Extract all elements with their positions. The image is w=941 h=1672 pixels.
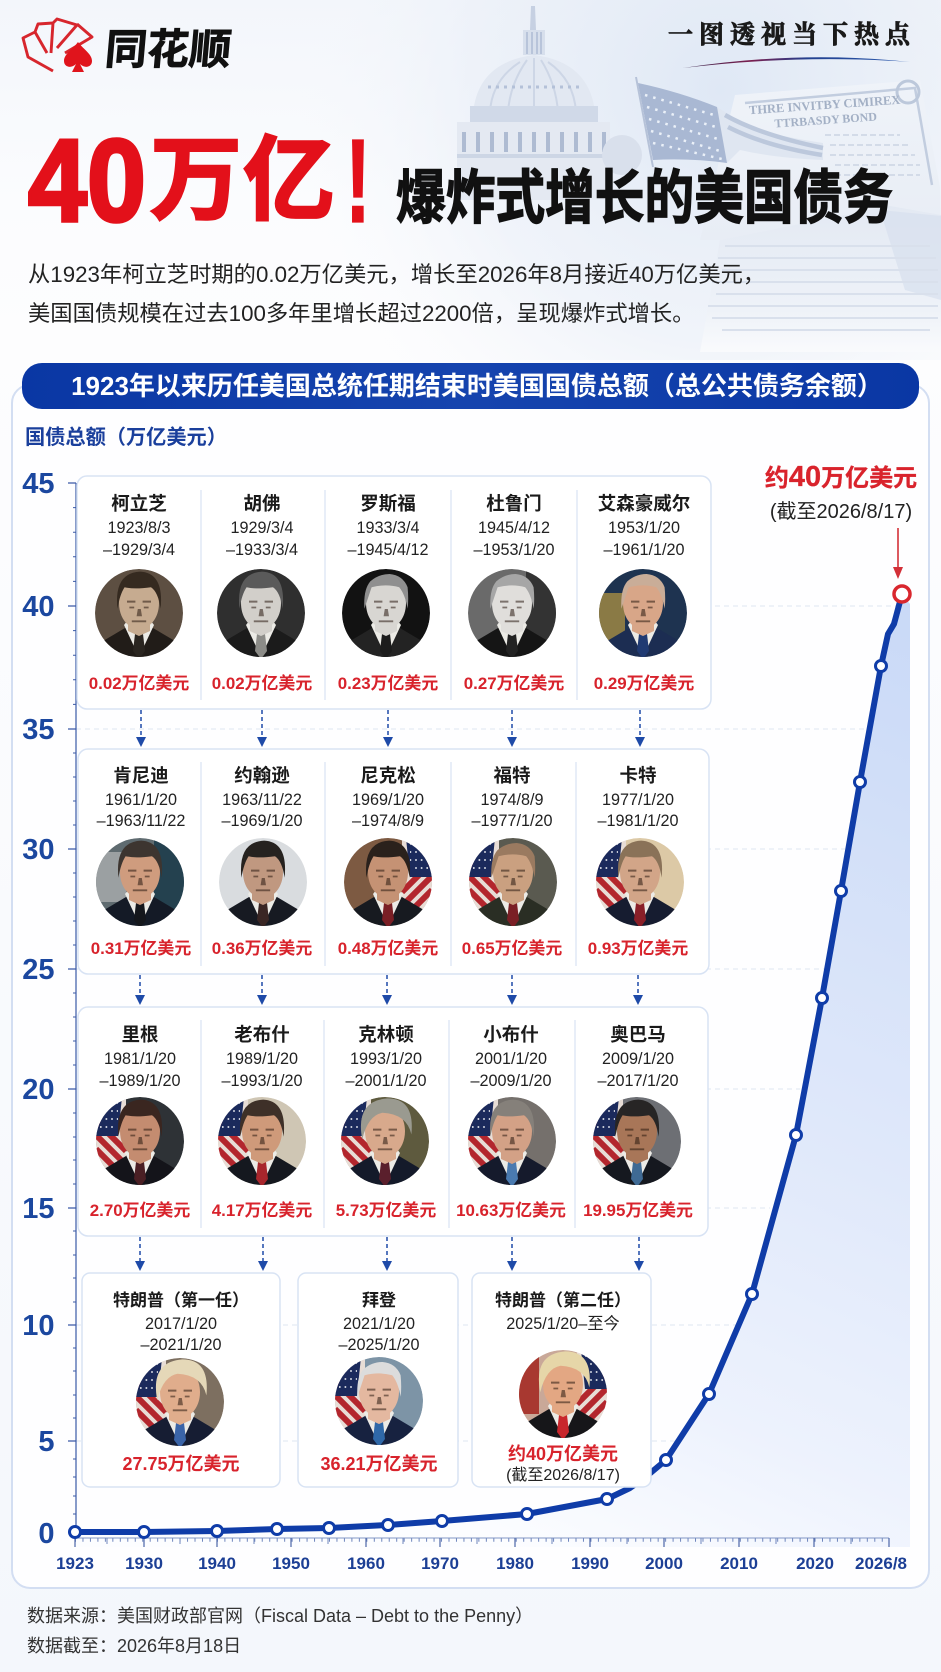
curve data points: [70, 660, 886, 1538]
card row 2: [78, 749, 709, 974]
panel heading: [22, 363, 919, 409]
president: 福特: 0.65万亿美元: [462, 938, 562, 958]
chart panel: [12, 385, 929, 1588]
callout: about 40 trillion: 约40万亿美元: [765, 461, 917, 493]
president: 福特: –1977/1/20: [471, 812, 553, 830]
main title: !: [345, 115, 371, 248]
president: 胡佛: 胡佛: [243, 493, 281, 514]
tagline: 一图透视当下热点: [668, 15, 916, 51]
president: 卡特: 0.93万亿美元: [588, 938, 688, 958]
y axis labels: [22, 468, 54, 1550]
arrows between rows 3 and 4: [135, 1237, 644, 1271]
main title: 40: [28, 115, 146, 246]
y axis labels: 25: [22, 954, 54, 986]
capitol dome: [457, 6, 642, 200]
president: 罗斯福: 0.23万亿美元: [338, 673, 438, 693]
president: 老布什: 1989/1/20: [226, 1050, 298, 1068]
y axis labels: 10: [22, 1310, 54, 1342]
president: 胡佛: 1929/3/4: [230, 519, 294, 537]
card: 拜登: 拜登: [362, 1291, 396, 1310]
y axis labels: 5: [38, 1426, 54, 1458]
president: 奥巴马: –2017/1/20: [597, 1072, 679, 1090]
x axis labels: 1930: [125, 1554, 163, 1573]
president: 罗斯福: 罗斯福: [360, 493, 416, 514]
x axis labels: [56, 1554, 907, 1573]
president: 约翰逊: [212, 765, 312, 958]
main title: [28, 115, 371, 248]
president: 罗斯福: 1933/3/4: [356, 519, 420, 537]
x axis labels: 1950: [272, 1554, 310, 1573]
president: 里根: [90, 1024, 190, 1220]
president: 约翰逊: –1969/1/20: [221, 812, 303, 830]
y axis labels: 15: [22, 1193, 54, 1225]
president: 胡佛: [212, 493, 312, 693]
president: 柯立芝: [89, 493, 189, 693]
card: 拜登: –2025/1/20: [338, 1336, 420, 1354]
president: 老布什: –1993/1/20: [221, 1072, 303, 1090]
president: 艾森豪威尔: 0.29万亿美元: [594, 673, 694, 693]
x axis labels: 1970: [421, 1554, 459, 1573]
president: 艾森豪威尔: –1961/1/20: [603, 541, 685, 559]
president: 卡特: –1981/1/20: [597, 812, 679, 830]
president: 里根: –1989/1/20: [99, 1072, 181, 1090]
card: 特朗普第一任: 27.75万亿美元: [122, 1453, 240, 1474]
president: 艾森豪威尔: 1953/1/20: [608, 519, 680, 537]
president: 约翰逊: 0.36万亿美元: [212, 938, 312, 958]
president: 克林顿: [336, 1024, 436, 1220]
card: 拜登: 36.21万亿美元: [320, 1453, 438, 1474]
card row 1: [77, 476, 711, 709]
arrows between rows 2 and 3: [135, 975, 643, 1005]
callout: about 40 trillion: (截至2026/8/17): [770, 500, 912, 523]
president: 老布什: 4.17万亿美元: [212, 1200, 312, 1220]
x axis: [56, 1538, 907, 1573]
card: 特朗普第一任: 2017/1/20: [145, 1315, 217, 1333]
president: 柯立芝: –1929/3/4: [103, 541, 175, 559]
bond document lettering: THRE INVITBY CIMIREX: [749, 93, 901, 117]
president: 肯尼迪: 0.31万亿美元: [91, 938, 191, 958]
president: 柯立芝: 1923/8/3: [107, 519, 171, 537]
y axis: [22, 468, 76, 1550]
president: 克林顿: 克林顿: [358, 1024, 414, 1045]
x axis labels: 1990: [571, 1554, 609, 1573]
intro text: [28, 262, 765, 326]
latest point marker: [894, 586, 910, 602]
y axis labels: 30: [22, 834, 54, 866]
card: 特朗普第二任: 特朗普（第二任）: [495, 1290, 631, 1310]
card: 特朗普第一任: –2021/1/20: [140, 1336, 222, 1354]
president: 里根: 里根: [121, 1024, 159, 1045]
president: 肯尼迪: 肯尼迪: [113, 765, 169, 786]
x axis labels: 1980: [496, 1554, 534, 1573]
president: 老布什: [212, 1024, 312, 1220]
president: 胡佛: –1933/3/4: [226, 541, 298, 559]
president: 里根: 1981/1/20: [104, 1050, 176, 1068]
president: 柯立芝: 柯立芝: [111, 493, 167, 514]
y axis labels: 35: [22, 714, 54, 746]
president: 约翰逊: 1963/11/22: [222, 791, 302, 809]
logo: 同花顺: [23, 19, 233, 73]
y axis labels: 0: [38, 1518, 54, 1550]
president: 尼克松: 0.48万亿美元: [338, 938, 438, 958]
area under curve: [75, 594, 910, 1547]
main title: 万亿: [150, 130, 336, 232]
arrows between rows 1 and 2: [136, 710, 645, 747]
debt curve line: [75, 594, 902, 1532]
card: 拜登: [298, 1273, 458, 1487]
president: 约翰逊: 约翰逊: [234, 765, 290, 786]
president: 胡佛: 0.02万亿美元: [212, 673, 312, 693]
bond document lettering: [749, 93, 902, 132]
president: 肯尼迪: –1963/11/22: [97, 812, 185, 830]
president: 奥巴马: 奥巴马: [610, 1024, 666, 1045]
president: 杜鲁门: 杜鲁门: [486, 493, 542, 514]
portrait: 特朗普 first term: [134, 1358, 226, 1448]
president: 小布什: 2001/1/20: [475, 1050, 547, 1068]
president: 奥巴马: 19.95万亿美元: [583, 1200, 693, 1220]
y axis labels: 40: [22, 591, 54, 623]
card: 特朗普第二任: 2025/1/20–至今: [506, 1315, 620, 1333]
logo: 同花顺: 同花顺: [103, 26, 233, 73]
president: 奥巴马: 2009/1/20: [602, 1050, 674, 1068]
president: 小布什: 10.63万亿美元: [456, 1200, 566, 1220]
x axis labels: 1960: [347, 1554, 385, 1573]
x axis labels: 2000: [645, 1554, 683, 1573]
president: 老布什: 老布什: [234, 1024, 290, 1045]
background illustration: capitol, flag, treasury bond and papers: [457, 6, 941, 352]
panel heading: 1923年以来历任美国总统任期结束时美国国债总额（总公共债务余额）: [71, 371, 883, 401]
president: 克林顿: 5.73万亿美元: [336, 1200, 436, 1220]
dashed gridlines: [76, 606, 902, 1441]
footer source note: 数据来源：美国财政部官网（Fiscal Data – Debt to the Penny）: [27, 1606, 533, 1626]
y axis title: 国债总额（万亿美元）: [25, 426, 227, 449]
callout: about 40 trillion: [765, 461, 917, 523]
president: 福特: 福特: [493, 765, 531, 786]
y axis labels: 20: [22, 1074, 54, 1106]
president: 福特: 1974/8/9: [480, 791, 544, 809]
president: 罗斯福: [338, 493, 438, 693]
president: 艾森豪威尔: [594, 493, 694, 693]
x axis labels: 1940: [198, 1554, 236, 1573]
footer source note: [27, 1606, 533, 1656]
card: 特朗普第二任: [472, 1273, 651, 1487]
x axis labels: 2020: [796, 1554, 834, 1573]
x axis labels: 2010: [720, 1554, 758, 1573]
president: 克林顿: 1993/1/20: [350, 1050, 422, 1068]
card: 特朗普第一任: [82, 1273, 280, 1487]
y axis labels: 45: [22, 468, 54, 500]
card: 特朗普第二任: 约40万亿美元: [508, 1443, 618, 1464]
president: 卡特: [588, 765, 688, 958]
card: 特朗普第一任: 特朗普（第一任）: [113, 1290, 249, 1310]
president: 卡特: 1977/1/20: [602, 791, 674, 809]
intro text: 从1923年柯立芝时期的0.02万亿美元，增长至2026年8月接近40万亿美元，: [28, 262, 765, 287]
bond document lettering: TTRBASDY BOND: [774, 109, 878, 131]
president: 杜鲁门: 1945/4/12: [478, 519, 550, 537]
president: 杜鲁门: –1953/1/20: [473, 541, 555, 559]
president: 尼克松: –1974/8/9: [352, 812, 424, 830]
president: 尼克松: [338, 765, 438, 958]
president: 罗斯福: –1945/4/12: [347, 541, 429, 559]
president: 杜鲁门: 0.27万亿美元: [464, 673, 564, 693]
president: 小布什: 小布什: [483, 1024, 539, 1045]
x axis labels: 1923: [56, 1554, 94, 1573]
president: 里根: 2.70万亿美元: [90, 1200, 190, 1220]
footer source note: 数据截至：2026年8月18日: [27, 1636, 241, 1656]
president: 尼克松: 尼克松: [360, 765, 416, 786]
president: 柯立芝: 0.02万亿美元: [89, 673, 189, 693]
portrait: 拜登: [333, 1357, 425, 1447]
card row 3: [78, 1007, 708, 1236]
president: 小布什: [456, 1024, 566, 1220]
subtitle: 爆炸式增长的美国债务: [396, 165, 893, 231]
president: 奥巴马: [583, 1024, 693, 1220]
portrait: 特朗普 second term: [517, 1350, 609, 1440]
intro text: 美国国债规模在过去100多年里增长超过2200倍，呈现爆炸式增长。: [28, 301, 695, 326]
president: 卡特: 卡特: [619, 765, 657, 786]
president: 尼克松: 1969/1/20: [352, 791, 424, 809]
card: 拜登: 2021/1/20: [343, 1315, 415, 1333]
president: 克林顿: –2001/1/20: [345, 1072, 427, 1090]
president: 肯尼迪: 1961/1/20: [105, 791, 177, 809]
president: 肯尼迪: [91, 765, 191, 958]
american flag: [636, 77, 823, 167]
x axis labels: 2026/8: [855, 1554, 907, 1573]
tagline: [668, 15, 916, 68]
arrow: callout to latest point: [893, 528, 903, 579]
president: 艾森豪威尔: 艾森豪威尔: [598, 493, 690, 514]
president: 杜鲁门: [464, 493, 564, 693]
president: 福特: [462, 765, 562, 958]
card: 特朗普第二任: (截至2026/8/17): [506, 1466, 620, 1484]
president: 小布什: –2009/1/20: [470, 1072, 552, 1090]
